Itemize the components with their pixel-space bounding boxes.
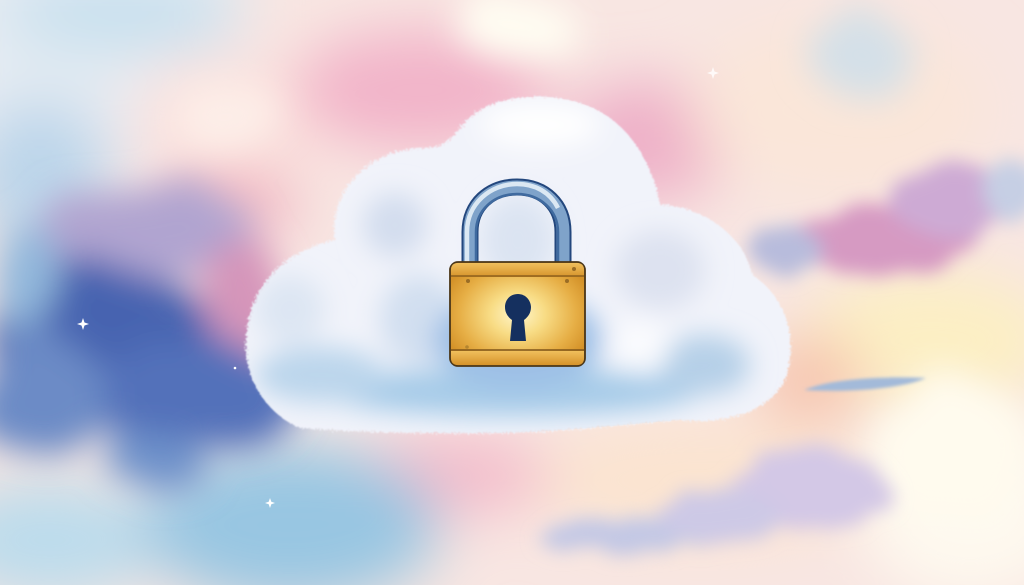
cloud: [246, 97, 791, 433]
right mauve cloud: [749, 160, 1024, 274]
padlock keyhole: [505, 294, 531, 341]
lower lilac cloud: [535, 448, 885, 553]
padlock body: [450, 262, 585, 366]
icon: padlock: [450, 184, 585, 366]
padlock shackle: [467, 184, 563, 264]
wisp: small blue cloud streak: [804, 377, 926, 391]
sparkles: [77, 67, 719, 508]
